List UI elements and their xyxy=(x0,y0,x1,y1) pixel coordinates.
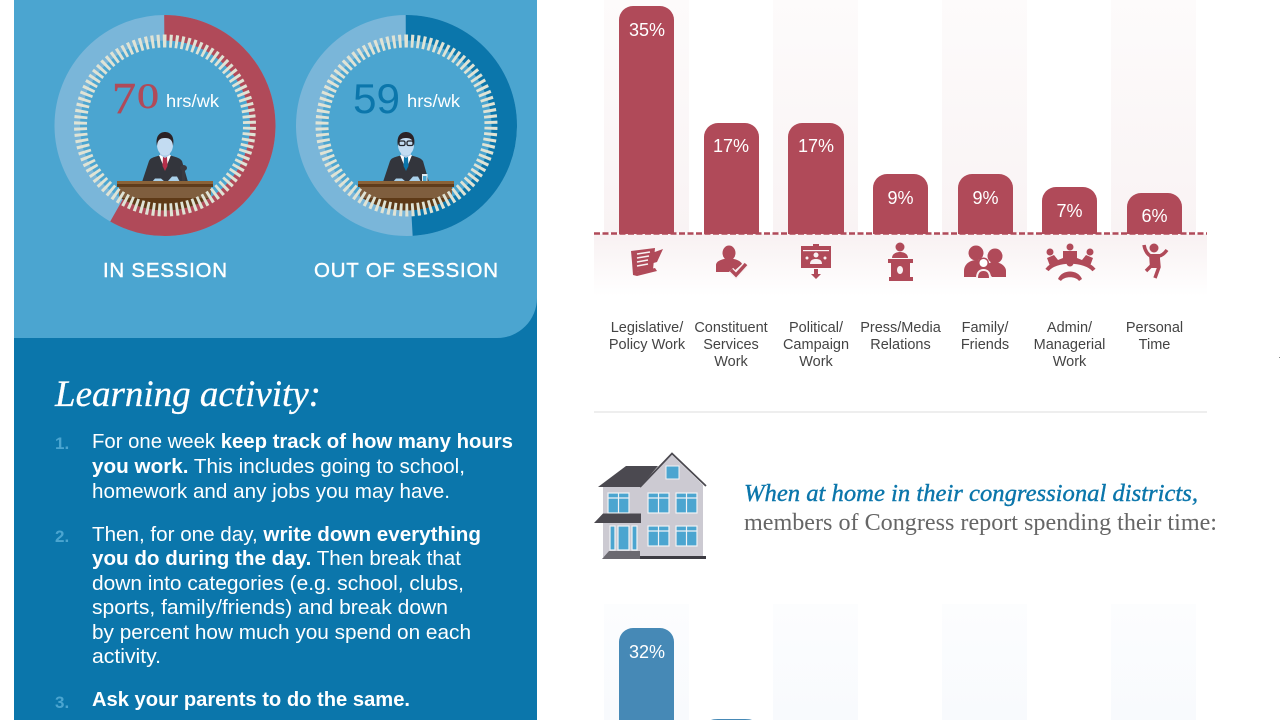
label: legislative policy work: Legislative/ xyxy=(611,320,684,336)
icon: campaign sign xyxy=(801,244,831,279)
value: 70 hrs/wk: 0 xyxy=(137,76,159,116)
label: constituent services work: Work xyxy=(714,354,749,370)
icon: press podium xyxy=(888,242,913,281)
text block: activity step 2 xyxy=(55,523,481,668)
value: 59 hrs/wk xyxy=(353,75,460,122)
label: family friends: Family/ xyxy=(962,320,1009,336)
label: admin managerial work: Admin/ xyxy=(1047,320,1093,336)
label: constituent services work: Constituent xyxy=(694,320,768,336)
glasses xyxy=(399,141,413,146)
value: 70 hrs/wk: 7 xyxy=(112,74,136,123)
bar: press 9%: 9% xyxy=(887,188,914,208)
text block: activity step 2: sports, family/friends) and break down xyxy=(92,596,448,619)
bar: constituent 17%: 17% xyxy=(713,136,749,156)
label: political campaign work: Campaign xyxy=(783,337,849,353)
text block: activity step 2: Then, for one day, write down everything xyxy=(92,523,481,546)
figure: congressman with glasses at podium xyxy=(358,132,454,218)
bar: second bar top xyxy=(711,719,752,720)
bar: personal 6%: 6% xyxy=(1141,206,1168,226)
bar: legislative 35%: 35% xyxy=(629,20,665,40)
heading: when at home: When at home in their congressional districts, xyxy=(744,480,1198,507)
label: legislative policy work: Policy Work xyxy=(609,337,686,353)
text block: activity step 1: homework and any jobs you may have. xyxy=(92,480,450,503)
text block: activity step 2: by percent how much you spend on each xyxy=(92,621,471,644)
text block: activity step 2: you do during the day. Then break that xyxy=(92,547,461,570)
value: 59 hrs/wk: 59 xyxy=(353,75,400,122)
bar: legislative 35% xyxy=(619,6,674,234)
icon: jumping person xyxy=(1144,244,1167,278)
text block: activity step 2: down into categories (e.g. school, clubs, xyxy=(92,572,464,595)
text block: activity step 3: Ask your parents to do the same. xyxy=(92,688,410,711)
icon: house xyxy=(594,454,706,559)
label: admin managerial work: Managerial xyxy=(1034,337,1105,353)
label: admin managerial work: Work xyxy=(1053,354,1087,370)
bar: campaign 17%: 17% xyxy=(798,136,834,156)
label: press media relations: Press/Media xyxy=(860,320,942,336)
bar: admin 7% xyxy=(1042,187,1097,234)
label: constituent services work: Services xyxy=(703,337,759,353)
text block: activity step 3: 3. xyxy=(55,693,69,712)
bar: 32% xyxy=(619,628,674,720)
icon: constituent with check mark xyxy=(716,246,746,275)
value: 70 hrs/wk: hrs/wk xyxy=(166,91,219,111)
text block: activity step 1: For one week keep track of how many hours xyxy=(92,430,513,453)
label: personal time: Time xyxy=(1139,337,1170,353)
panel: left dark blue column xyxy=(14,0,537,720)
bar: family 9% xyxy=(958,174,1013,234)
heading: learning activity: Learning activity: xyxy=(54,374,321,415)
chart: out of session ring gauge xyxy=(309,28,504,223)
chart: time in Washington bar chart xyxy=(594,0,1207,370)
bar: constituent 17% xyxy=(704,123,759,234)
label: press media relations: Relations xyxy=(870,337,931,353)
text block: activity step 1: 1. xyxy=(55,434,69,453)
windows xyxy=(608,493,697,550)
panel: hours per week light blue xyxy=(14,0,537,338)
chart: in session ring gauge xyxy=(67,28,263,223)
label: family friends: Friends xyxy=(961,337,1009,353)
subheading: members of congress: members of Congress report spending their time: xyxy=(744,510,1217,536)
text block: activity step 2: 2. xyxy=(55,527,69,546)
value: 59 hrs/wk: hrs/wk xyxy=(407,91,460,111)
tick marks xyxy=(322,41,491,210)
bar: press 9% xyxy=(873,174,928,234)
bar: personal 6% xyxy=(1127,193,1182,234)
label: political campaign work: Work xyxy=(799,354,834,370)
icon: scroll and quill xyxy=(631,248,663,276)
text block: activity step 1: you work. This includes going to school, xyxy=(92,455,465,478)
label: political campaign work: Political/ xyxy=(789,320,844,336)
label: personal time: Personal xyxy=(1126,320,1183,336)
bar: family 9%: 9% xyxy=(972,188,999,208)
tick marks xyxy=(80,41,250,210)
label: in session: IN SESSION xyxy=(103,259,227,282)
figure: congressman at podium xyxy=(117,132,213,218)
icon: managerial group xyxy=(1046,244,1094,281)
bar: 32%: 32% xyxy=(629,642,665,662)
value: 70 hrs/wk xyxy=(112,74,219,123)
text block: activity step 2: activity. xyxy=(92,645,161,668)
bar: admin 7%: 7% xyxy=(1056,201,1083,221)
bar: campaign 17% xyxy=(788,123,844,234)
text block: activity step 1 xyxy=(55,430,513,503)
icon: family xyxy=(964,246,1006,278)
label: out of session: OUT OF SESSION xyxy=(314,259,498,282)
chart: time at home bar chart xyxy=(604,604,1196,720)
